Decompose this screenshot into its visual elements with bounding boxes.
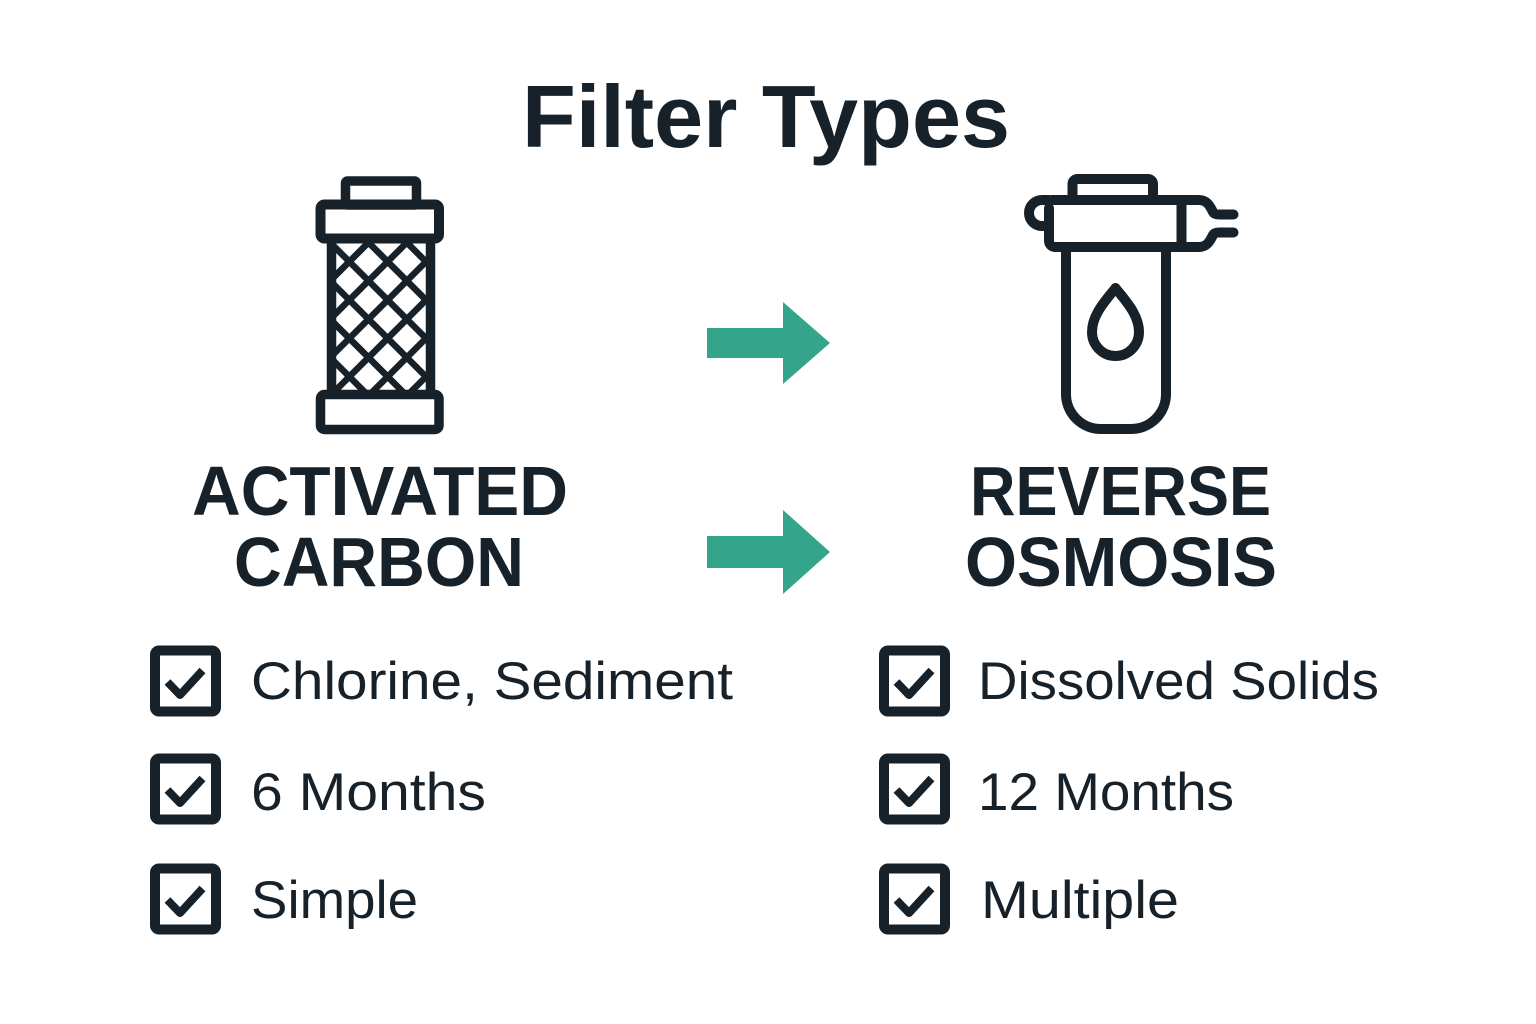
heading: activated carbon [192,452,568,601]
item: chlorine, sediment: Chlorine, Sediment [251,652,733,711]
heading: reverse osmosis: REVERSE [970,452,1271,530]
item: simple: Simple [251,871,418,930]
icon: reverse osmosis filter [1029,179,1234,429]
item: 12 months [884,758,1234,822]
arrow: bottom [707,510,830,594]
item: dissolved solids: Dissolved Solids [978,652,1379,711]
heading: activated carbon: ACTIVATED [192,452,568,530]
title: Filter Types [522,67,1010,166]
icon: activated carbon filter [316,176,444,434]
arrow: top [707,302,830,384]
list: activated carbon [155,650,733,930]
heading: activated carbon: CARBON [234,523,524,601]
heading: reverse osmosis [965,452,1277,601]
item: 6 months [155,758,486,822]
item: simple [155,868,418,930]
item: 6 months: 6 Months [251,763,486,822]
heading: reverse osmosis: OSMOSIS [965,523,1277,601]
list: reverse osmosis [884,650,1379,930]
item: multiple [884,868,1179,930]
item: 12 months: 12 Months [978,763,1234,822]
item: multiple: Multiple [981,871,1179,930]
